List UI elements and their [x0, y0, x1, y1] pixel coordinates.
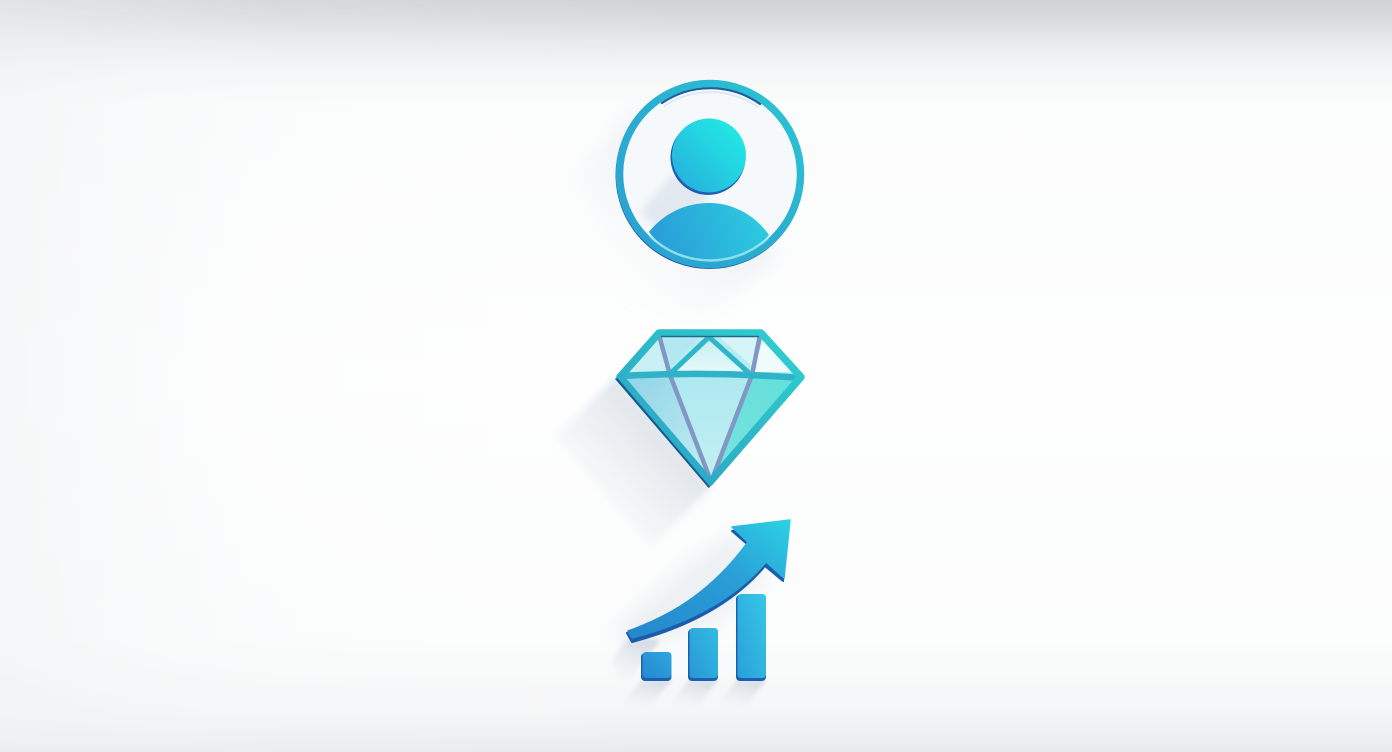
icon: user in circle — [575, 82, 802, 320]
ring — [617, 82, 802, 268]
icon: diamond — [556, 330, 805, 548]
user shoulders — [649, 203, 769, 264]
icon: growth arrow and bars — [612, 520, 790, 708]
diamond inner lines — [620, 335, 801, 476]
bar tall — [736, 594, 766, 681]
bar medium — [688, 628, 718, 681]
arrow — [627, 520, 790, 642]
user head — [670, 118, 746, 195]
bar small — [641, 652, 672, 681]
diamond outline — [620, 333, 801, 482]
diamond facets — [615, 330, 805, 488]
